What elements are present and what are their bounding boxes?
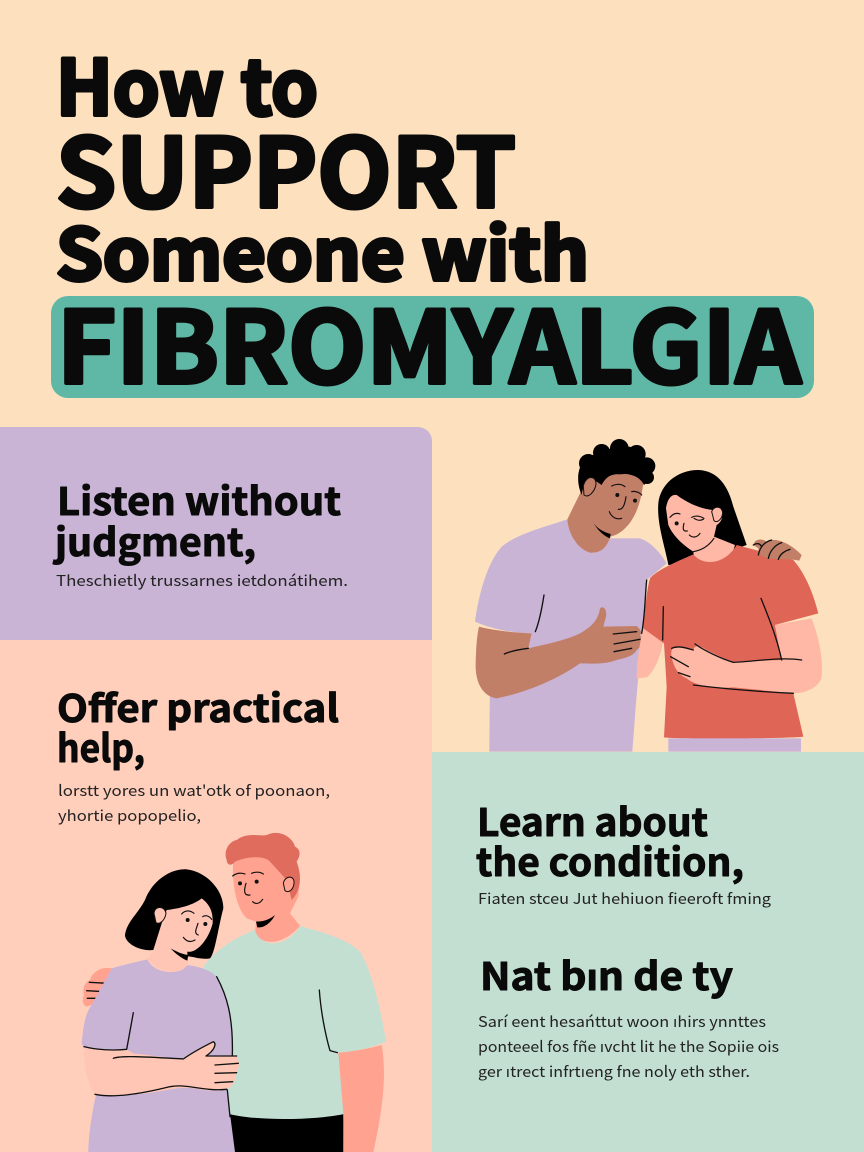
man: arm and hand bbox=[476, 607, 642, 698]
man: hair bbox=[578, 439, 655, 495]
woman: lines bbox=[84, 977, 238, 1117]
woman: ear and face details bbox=[670, 507, 723, 552]
man: hand on shoulder bbox=[753, 539, 802, 561]
text: closing body: Sarí eent hesańttut woon ıhirs ynnttes bbox=[478, 1011, 766, 1032]
man: face bbox=[591, 484, 642, 538]
man: ear bbox=[583, 477, 596, 496]
text: closing body: ponteeel fos fñe ıvcht lit he the Sopiie ois bbox=[478, 1036, 779, 1057]
woman: trousers bbox=[668, 738, 801, 752]
man: neck and head bbox=[567, 463, 644, 553]
title: Someone with bbox=[56, 199, 589, 301]
heading: listen without judgment: Listen without bbox=[57, 471, 341, 526]
woman: neck and face bbox=[666, 495, 735, 564]
woman: face bbox=[171, 911, 212, 961]
panel: offer practical help: yhortie popopelio, bbox=[58, 805, 201, 826]
panel: listen without judgment bbox=[0, 427, 432, 640]
woman: hair bbox=[658, 470, 747, 565]
woman: hair bbox=[125, 869, 223, 959]
man: shirt bbox=[475, 519, 667, 752]
woman: shirt bbox=[82, 959, 235, 1152]
text: closing body: ger ıtrect infrtıeng fne noly eth sther. bbox=[478, 1061, 750, 1082]
man: hand on shoulder bbox=[83, 968, 117, 1007]
panel: learn about the condition bbox=[432, 752, 864, 1152]
title highlight: fibromyalgia: FIBROMYALGIA bbox=[57, 268, 802, 412]
woman: right arm skin behind bbox=[637, 627, 663, 678]
woman: neck and face bbox=[147, 898, 213, 972]
man: finger lines bbox=[87, 982, 107, 998]
man: hair bbox=[226, 833, 300, 900]
illustration: man comforting woman bbox=[475, 439, 822, 752]
man: neck and head bbox=[233, 853, 300, 942]
title: SUPPORT bbox=[56, 98, 516, 235]
man: shirt bbox=[203, 926, 386, 1119]
man: sleeve and finger lines bbox=[504, 595, 640, 654]
woman: shirt bbox=[643, 545, 818, 739]
man: arm bbox=[338, 1045, 384, 1152]
panel: listen without judgment: judgment, bbox=[52, 512, 256, 567]
heading: offer practical help: Offer practical bbox=[57, 678, 339, 733]
man: ear bbox=[283, 877, 294, 892]
text: closing body bbox=[478, 1011, 779, 1082]
illustration: woman and red-haired man embracing bbox=[82, 833, 386, 1152]
woman: ear bbox=[154, 907, 166, 923]
text: learn body: Fiaten stceu Jut hehiuon fieeroft fming bbox=[478, 888, 772, 909]
title bbox=[56, 27, 589, 301]
woman: arm and hand bbox=[671, 618, 822, 693]
panel: offer practical help bbox=[0, 640, 432, 1152]
woman: arm and hand bbox=[84, 1042, 239, 1096]
man: sleeve line bbox=[319, 990, 337, 1053]
man: trousers bbox=[227, 1113, 343, 1152]
man: finger lines bbox=[753, 540, 790, 559]
panel: learn about the condition: the condition, bbox=[476, 832, 744, 887]
man: face bbox=[233, 872, 275, 927]
woman: shirt and arm lines bbox=[642, 580, 802, 693]
title: How to bbox=[56, 27, 318, 137]
heading: nat bin de ty: Nat bın de ty bbox=[480, 946, 733, 1001]
panel: offer practical help: help, bbox=[57, 718, 145, 773]
heading: learn about the condition: Learn about bbox=[477, 792, 708, 847]
text: offer help body: lorstt yores un wat'otk of poonaon, bbox=[58, 780, 330, 801]
text: listen body: Theschietly trussarnes ietdonátihem. bbox=[56, 570, 348, 591]
